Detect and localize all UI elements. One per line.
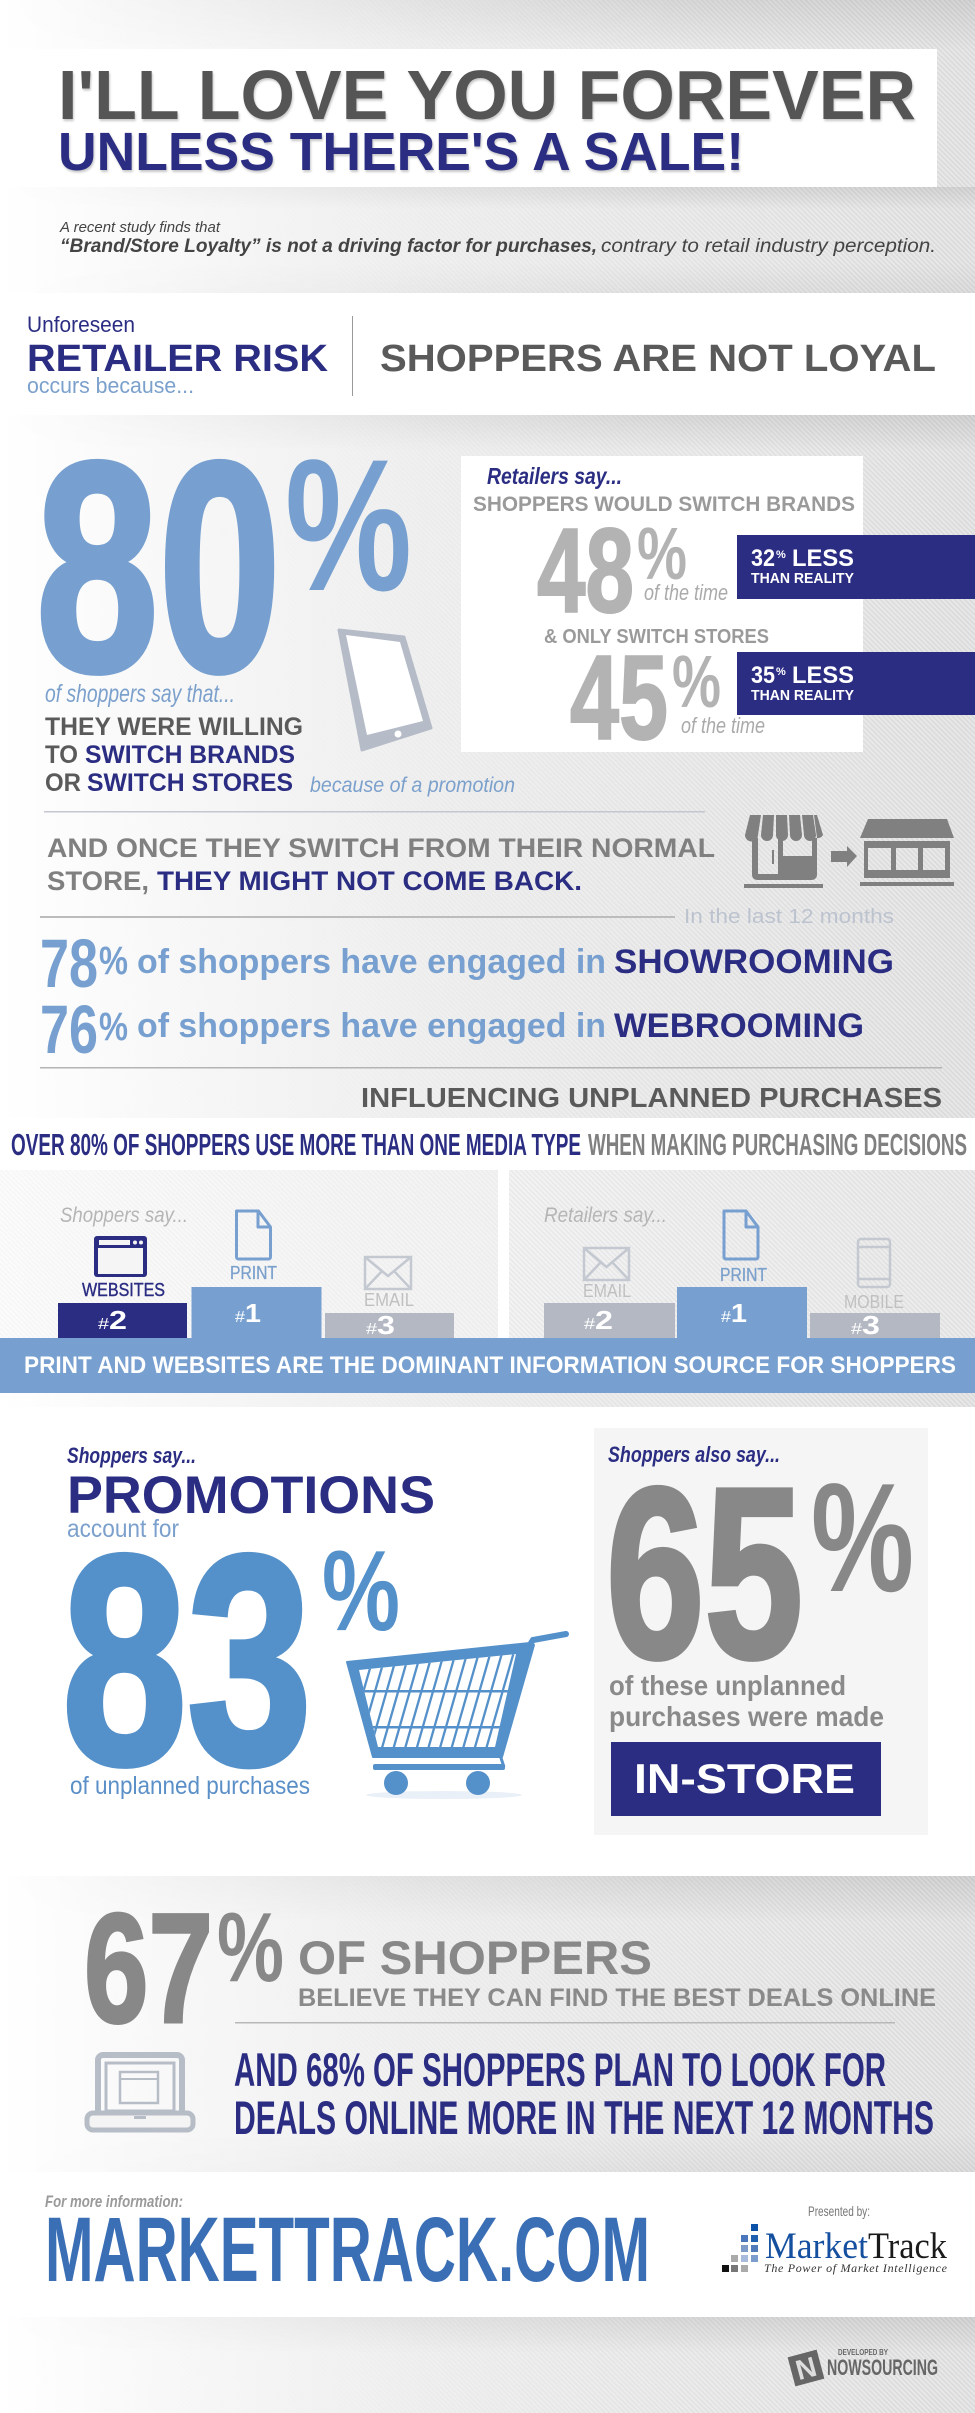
label: mobile: MOBILE [844, 1292, 904, 1312]
icon: tablet [339, 630, 431, 750]
intro text [59, 219, 936, 257]
callout: in-store: IN-STORE [634, 1755, 855, 1802]
text: shoppers willing to switch: of shoppers say that... [45, 680, 235, 708]
panel: retailers say media [509, 1170, 975, 1340]
text: shoppers say promotions: account for [67, 1515, 179, 1543]
logo: MarketTrack: The Power of Market Intelligence [764, 2261, 948, 2275]
icon: website [94, 1236, 147, 1277]
stat: 48 percent: % [637, 512, 687, 595]
bar: rank 2 websites [58, 1303, 187, 1338]
stat: 45 percent: 45 [570, 631, 668, 765]
callout: 32 percent less: % [776, 549, 786, 561]
stat: 67 percent: % [217, 1892, 284, 2002]
stat: 83 percent: 83 [62, 1494, 312, 1827]
stat: 45 percent: % [672, 640, 721, 723]
bar: rank 2 email: #2 [584, 1305, 613, 1335]
text: might not come back [47, 833, 715, 896]
stat: showrooming: SHOWROOMING [614, 943, 894, 981]
icon: email [584, 1248, 629, 1280]
text: 68 percent plan to look for deals [234, 2043, 934, 2144]
icon: shopping cart [347, 1634, 566, 1799]
logo: NowSourcing [788, 2348, 938, 2387]
text: shoppers say promotions [67, 1443, 435, 1543]
text: might not come back: STORE, [47, 866, 149, 896]
text: unplanned purchases made: of these unplanned [609, 1670, 846, 1701]
icon: mobile phone [858, 1239, 890, 1287]
bar: rank 3 email [325, 1310, 454, 1340]
callout: 35 percent less: % [776, 666, 786, 678]
footer link: For more information: [45, 2192, 183, 2211]
heading: influencing unplanned purchases: INFLUENCING UNPLANNED PURCHASES [361, 1082, 942, 1113]
logo: MarketTrack: Market [765, 2226, 869, 2267]
bar: rank 3 mobile: #3 [851, 1310, 880, 1340]
retailer risk heading: RETAILER RISK [27, 338, 329, 380]
label: websites: WEBSITES [82, 1280, 165, 1300]
stat: showrooming: of shoppers have engaged in [137, 943, 606, 981]
retailer risk heading: Unforeseen [27, 312, 135, 337]
intro text: contrary to retail industry perception. [601, 236, 936, 257]
stat: 83 percent: % [322, 1528, 400, 1655]
bar: rank 1 print [192, 1287, 322, 1338]
label: shoppers say: Shoppers say... [60, 1204, 188, 1227]
icon: store to store [744, 815, 954, 888]
text: unplanned purchases made [609, 1670, 884, 1732]
heading: media type: OVER 80% OF SHOPPERS USE MORE THAN ONE MEDIA TYPE [11, 1127, 581, 1162]
label: presented by: Presented by: [808, 2203, 870, 2219]
stat: 48 percent: 48 [537, 504, 634, 638]
heading: switch stores: & ONLY SWITCH STORES [544, 626, 769, 648]
icon: email [365, 1257, 411, 1289]
stat: 48 percent [537, 504, 728, 638]
stat: webrooming: WEBROOMING [614, 1007, 864, 1045]
stat: webrooming: 76 [40, 991, 98, 1068]
icon: print document [236, 1211, 270, 1259]
text: shoppers willing to switch: because of a promotion [310, 774, 515, 797]
label: last 12 months: In the last 12 months [684, 906, 894, 928]
label: email: EMAIL [364, 1290, 414, 1310]
bar: rank 1 print [677, 1287, 807, 1338]
stat: 45 percent: of the time [681, 713, 765, 738]
footer link: MARKETTRACK.COM [45, 2199, 650, 2301]
title line 2: UNLESS THERE'S A SALE! [58, 122, 744, 182]
label: email: EMAIL [583, 1281, 631, 1301]
retailer risk heading [27, 312, 329, 398]
text: shoppers willing to switch: TO [45, 741, 78, 769]
bar: rank 3 mobile [810, 1310, 940, 1340]
text: might not come back: THEY MIGHT NOT COME BACK. [157, 866, 582, 896]
label: print: PRINT [230, 1263, 277, 1283]
footer link [45, 2192, 650, 2301]
bar: rank 2 websites: #2 [98, 1305, 127, 1335]
title panel [0, 49, 937, 187]
stat: webrooming: % [99, 1005, 128, 1049]
bar: rank 1 print: #1 [235, 1298, 261, 1328]
stat: 65 percent: % [811, 1451, 914, 1624]
stat: 80 percent: 80 [36, 401, 281, 734]
retailers say label: Retailers say... [487, 463, 622, 489]
text: shoppers willing to switch: OR [45, 769, 81, 797]
bar: rank 2 email [544, 1303, 675, 1338]
callout: 35 percent less [737, 652, 975, 715]
callout: in-store [611, 1742, 881, 1816]
logo: MarketTrack: Track [868, 2226, 947, 2267]
stat: 67 percent: 67 [84, 1882, 213, 2056]
callout: 35 percent less: 35 [751, 662, 775, 689]
logo: MarketTrack [722, 2224, 948, 2275]
text: shoppers say promotions: Shoppers say... [67, 1443, 196, 1468]
logo: NowSourcing: DEVELOPED BY [838, 2348, 889, 2357]
stat: 67 percent: OF SHOPPERS [298, 1931, 652, 1984]
logo: NowSourcing: N [792, 2351, 820, 2386]
stat: webrooming: of shoppers have engaged in [137, 1007, 606, 1045]
text: shoppers willing to switch: SWITCH BRANDS [85, 741, 295, 769]
text: shoppers say promotions: PROMOTIONS [67, 1466, 435, 1525]
label: retailers say: Retailers say... [544, 1204, 667, 1227]
stat: 67 percent: BELIEVE THEY CAN FIND THE BEST DEALS ONLINE [298, 1984, 936, 2012]
panel: retailers say [461, 456, 863, 765]
stat: 45 percent [570, 631, 765, 765]
stat: showrooming: % [99, 939, 128, 983]
text: shoppers willing to switch: SWITCH STORES [87, 769, 293, 797]
stat: 48 percent: of the time [644, 580, 728, 605]
retailer risk heading: occurs because... [27, 373, 194, 398]
stat: 83 percent: of unplanned purchases [70, 1772, 310, 1800]
panel: shoppers also say [594, 1428, 928, 1835]
intro text: A recent study finds that [59, 219, 221, 236]
callout: 35 percent less: THAN REALITY [751, 687, 854, 704]
intro text: “Brand/Store Loyalty” is not a driving factor for purchases, [60, 236, 597, 257]
text: might not come back: AND ONCE THEY SWITCH FROM THEIR NORMAL [47, 833, 715, 863]
text: shoppers willing to switch [45, 680, 515, 797]
label: print: PRINT [720, 1265, 767, 1285]
heading: shoppers are not loyal: SHOPPERS ARE NOT LOYAL [380, 338, 936, 380]
bar: rank 1 print: #1 [721, 1298, 747, 1328]
icon: print document [724, 1211, 758, 1259]
stat: 65 percent: 65 [606, 1438, 803, 1709]
title line 1: I'LL LOVE YOU FOREVER [58, 56, 916, 134]
stat: 80 percent: % [285, 420, 412, 630]
text: shoppers willing to switch: THEY WERE WILLING [45, 713, 303, 741]
callout: 35 percent less: LESS [792, 662, 854, 689]
heading: would switch brands: SHOPPERS WOULD SWITCH BRANDS [473, 493, 855, 516]
text: unplanned purchases made: purchases were made [609, 1701, 884, 1732]
stat: showrooming [40, 925, 894, 1002]
callout: 32 percent less [737, 535, 975, 599]
callout: 32 percent less: 32 [751, 545, 775, 572]
callout: 32 percent less: THAN REALITY [751, 570, 854, 587]
bar: rank 3 email: #3 [366, 1310, 395, 1340]
stat: 67 percent [84, 1882, 936, 2056]
callout: 32 percent less: LESS [792, 545, 854, 572]
stat: showrooming: 78 [40, 925, 98, 1002]
label: shoppers also say: Shoppers also say... [608, 1442, 780, 1467]
white strip behind media heading [0, 1118, 975, 1170]
panel: shoppers say [0, 1170, 498, 1340]
icon: laptop [87, 2055, 193, 2130]
banner: dominant information source [0, 1338, 975, 1393]
stat: webrooming [40, 991, 864, 1068]
